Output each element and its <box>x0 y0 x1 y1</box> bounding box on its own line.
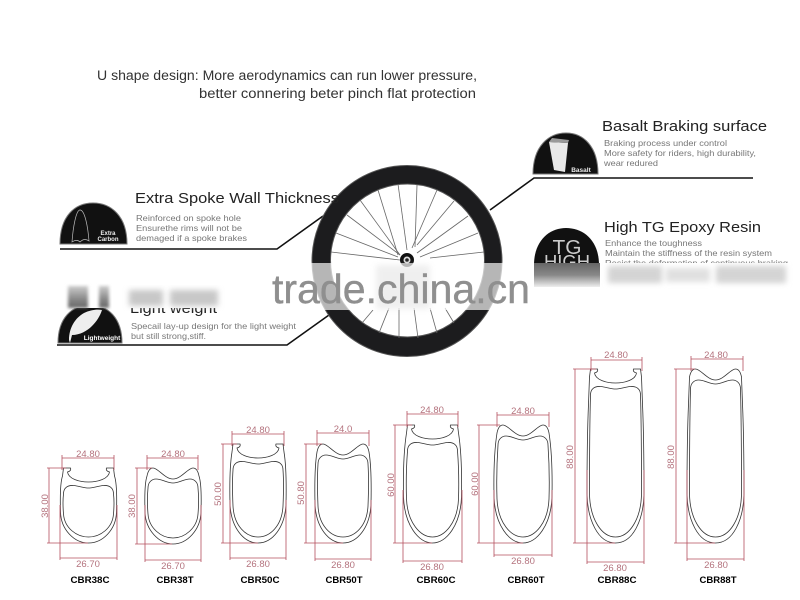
rim: CBR60T: CBR60T <box>508 575 545 586</box>
rim: CBR50T: 26.80 <box>331 560 355 571</box>
heading: U shape design: better connering beter pinch flat protection <box>199 86 476 101</box>
heading: U shape design: U shape design: More aerodynamics can run lower pressure, <box>97 68 477 83</box>
icon: high TG dome <box>534 228 599 285</box>
text block: high TG epoxy resin: Enhance the toughness <box>605 238 702 248</box>
text block: light weight: Specail lay-up design for the light weight <box>131 321 297 331</box>
rim: CBR50T: 24.0 <box>334 424 352 435</box>
band: TG text stripe <box>604 263 790 287</box>
text block: high TG epoxy resin <box>604 219 788 268</box>
rim: CBR60C: 26.80 <box>420 562 444 573</box>
rim: CBR38C: CBR38C <box>70 575 110 586</box>
dimension lines <box>674 356 744 561</box>
text block: light weight <box>130 300 297 341</box>
rim: CBR88C: 26.80 <box>603 563 627 574</box>
band: TG text blur <box>608 266 786 283</box>
rim: CBR60C: CBR60C <box>416 575 456 586</box>
text block: basalt braking surface: Braking process under control <box>604 138 727 148</box>
rim: CBR38T: 26.70 <box>161 561 185 572</box>
icon: basalt dome: Basalt <box>571 167 592 174</box>
rim: CBR38C: 38.00 <box>40 494 51 518</box>
rim: CBR60C: 60.00 <box>386 473 397 497</box>
spokes <box>331 184 484 338</box>
rim: CBR38T: 24.80 <box>161 449 185 460</box>
wheel hub <box>400 253 414 267</box>
text block: high TG epoxy resin: Resist the deformation of continuous braking <box>605 258 788 268</box>
icon: extra carbon dome: Extra <box>100 231 116 237</box>
rim: CBR88T: 26.80 <box>704 560 728 571</box>
icon: high TG dome: HIGH <box>544 252 590 272</box>
icon: high TG dome: TG <box>552 237 582 259</box>
dimension lines <box>477 412 552 557</box>
dimension lines <box>221 431 286 560</box>
rim: CBR50C <box>213 425 286 586</box>
text block: high TG epoxy resin: Maintain the stiffness of the resin system <box>605 248 772 258</box>
watermark band <box>62 263 790 312</box>
rim: CBR88T: 88.00 <box>666 445 677 469</box>
rim: CBR50T <box>296 424 371 586</box>
rim: CBR60T: 60.00 <box>470 472 481 496</box>
rim: CBR38T <box>127 449 201 586</box>
rim: CBR50C: CBR50C <box>240 575 280 586</box>
rim: CBR38T: CBR38T <box>156 575 194 586</box>
text block: basalt braking surface: wear redured <box>603 158 658 168</box>
rim: CBR50T: 50.80 <box>296 481 307 505</box>
text block: extra spoke wall thickness <box>135 190 339 243</box>
rim: CBR50T: CBR50T <box>326 575 363 586</box>
text block: extra spoke wall thickness: Ensurethe rims will not be <box>136 223 242 233</box>
rim: CBR38C: 24.80 <box>76 449 100 460</box>
text block: extra spoke wall thickness: demaged if a spoke brakes <box>136 233 247 243</box>
leader lines to wheel <box>57 178 753 345</box>
rim: CBR50C: 26.80 <box>246 559 270 570</box>
dimension lines <box>47 455 117 560</box>
text block: basalt braking surface: More safety for riders, high durability, <box>604 148 756 158</box>
rim: CBR60C: 24.80 <box>420 405 444 416</box>
band: lightweight stripes <box>68 286 218 308</box>
rim: CBR88C: CBR88C <box>598 575 637 586</box>
icon: lightweight dome: Lightweight <box>84 335 121 342</box>
rim: CBR38C: 26.70 <box>76 559 100 570</box>
rim: CBR38C <box>40 449 117 586</box>
dimension lines <box>135 455 201 562</box>
icon: extra carbon dome <box>60 203 127 244</box>
dimension lines <box>393 411 462 563</box>
rim: CBR88C: 24.80 <box>604 350 628 361</box>
rim: CBR60T: 26.80 <box>511 556 535 567</box>
band: wheel hub stripe <box>376 265 430 309</box>
rim: CBR88T: CBR88T <box>700 575 737 586</box>
rim: CBR38T: 38.00 <box>127 494 138 518</box>
rim: CBR60T: 24.80 <box>511 406 535 417</box>
text block: light weight: Light weight <box>130 300 218 317</box>
band: wheel wash <box>308 263 506 310</box>
icon: extra carbon dome: Carbon <box>98 237 119 243</box>
text block: high TG epoxy resin: High TG Epoxy Resin <box>604 219 761 236</box>
rim: CBR60T <box>470 406 552 586</box>
dimension lines <box>573 357 644 564</box>
rim: CBR60C <box>386 405 462 586</box>
band: TG icon stripe <box>534 263 600 287</box>
icon: lightweight dome <box>58 305 122 343</box>
wheel rim <box>312 166 502 356</box>
text block: basalt braking surface: Basalt Braking surface <box>602 118 767 135</box>
rim: CBR50C: 50.00 <box>213 482 224 506</box>
rim: CBR88T <box>666 350 744 586</box>
text block: light weight: but still strong,stiff. <box>131 331 206 341</box>
wheel <box>312 166 502 356</box>
rim: CBR50C: 24.80 <box>246 425 270 436</box>
rim: CBR88T: 24.80 <box>704 350 728 361</box>
text block: basalt braking surface <box>602 118 767 168</box>
watermark text: trade.china.cn <box>272 266 530 312</box>
rim: CBR88C: 88.00 <box>565 445 576 469</box>
dimension lines <box>304 430 371 561</box>
text block: extra spoke wall thickness: Extra Spoke Wall Thickness <box>135 190 339 207</box>
icon: basalt dome <box>533 133 598 174</box>
band: lightweight white-out <box>62 287 224 308</box>
rim: CBR88C <box>565 350 644 586</box>
heading: U shape design <box>97 68 477 101</box>
text block: extra spoke wall thickness: Reinforced on spoke hole <box>136 213 241 223</box>
